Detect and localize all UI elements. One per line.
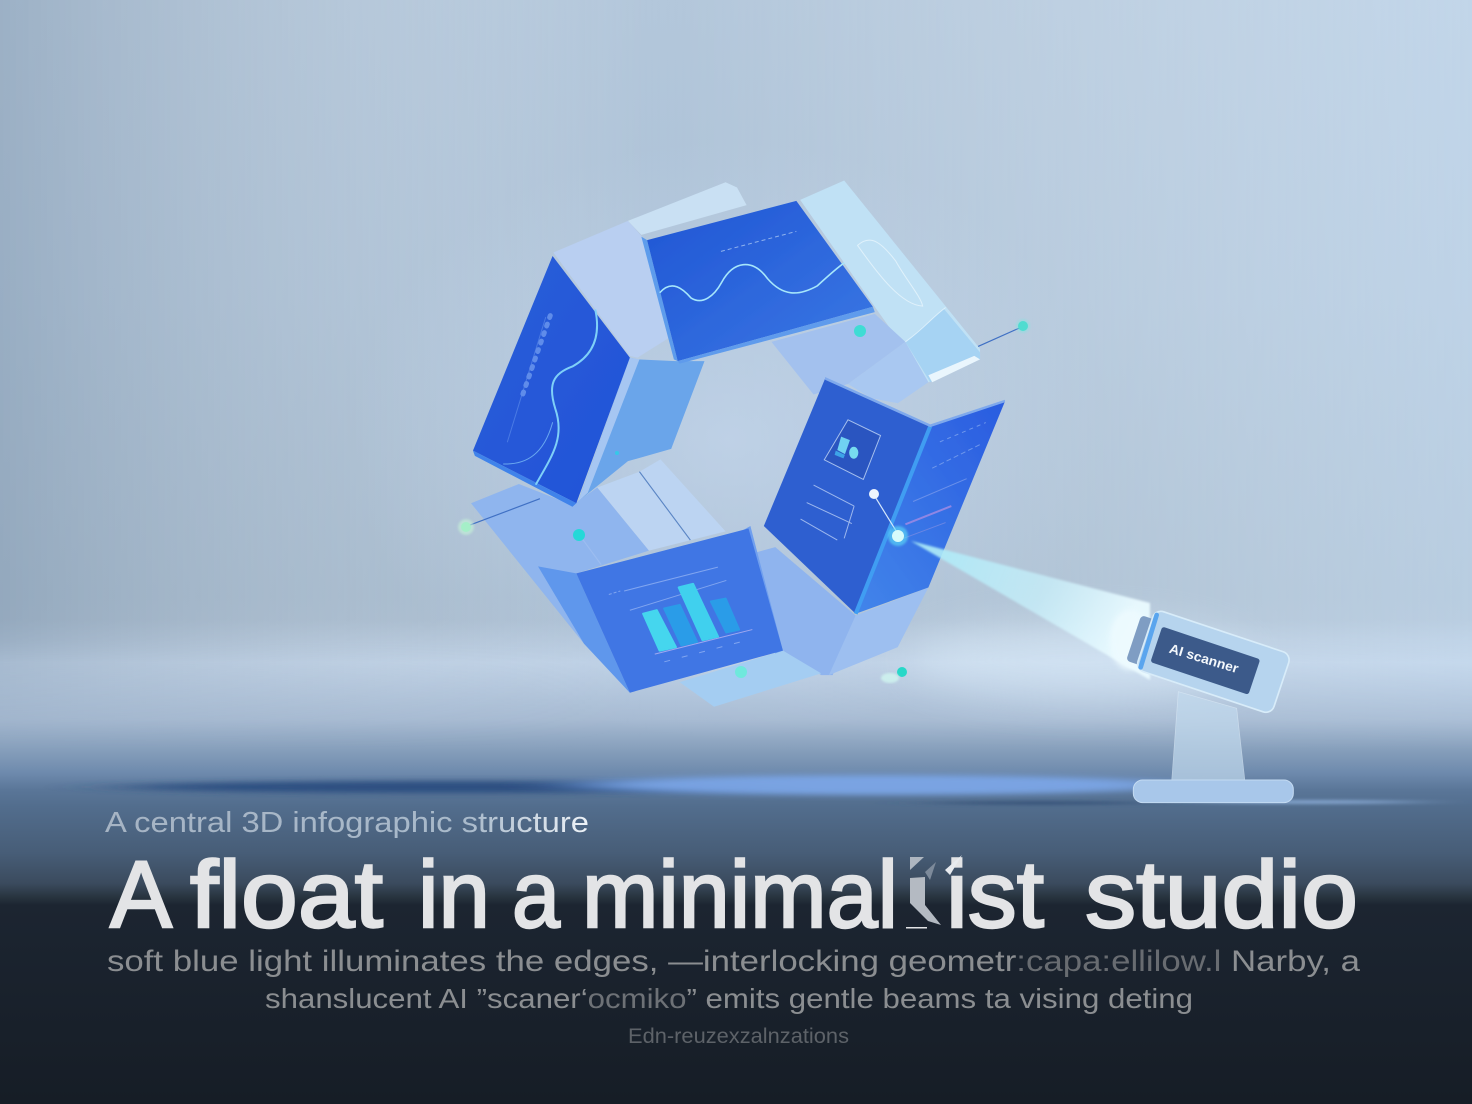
glowing nodes [458, 319, 1030, 683]
AI scanner device [1110, 609, 1293, 803]
title: a [512, 842, 560, 948]
scanner nozzle [1126, 615, 1163, 668]
title: minimal [582, 842, 898, 948]
thumbnail frame [824, 420, 881, 479]
gridlines [609, 567, 752, 662]
title: studio [1085, 842, 1358, 948]
panel: left wave screen [473, 256, 630, 507]
translucent back prisms [471, 181, 980, 707]
light beam [911, 541, 1150, 680]
bars [643, 584, 739, 651]
scanner stripe [1141, 615, 1157, 667]
panel: top wave screen [641, 201, 875, 364]
scanner display [1150, 627, 1260, 695]
scanner body [1135, 609, 1291, 715]
scanner glow [1110, 610, 1150, 670]
central 3D infographic structure [467, 181, 1022, 707]
connector lines [467, 327, 1022, 565]
subtitle: A central 3D infographic structure [105, 807, 589, 839]
description line 2: shanslucent AI ”scaner‘ ocmiko ” emits gentle beams ta vising deting [265, 983, 1193, 1014]
description line 3: Edn-reuzexzalnzations [628, 1025, 849, 1048]
description line 1: soft blue light illuminates the edges, —interlocking geometr :capa:ellilow.l Narby, a [107, 945, 1360, 978]
small caption [721, 231, 796, 251]
text lines [801, 423, 986, 540]
wave line [660, 263, 844, 301]
title: float [190, 842, 383, 948]
wave lines [504, 310, 597, 484]
title: in [418, 842, 490, 948]
title: A [110, 842, 173, 948]
title [110, 842, 1358, 948]
panel: bar chart screen [576, 526, 783, 693]
panel: right report screen [764, 377, 1005, 614]
map sketch on top right prism [858, 240, 946, 342]
scanner base [1133, 780, 1293, 803]
scanner label: AI scanner [1167, 641, 1240, 676]
title: ist [946, 842, 1044, 948]
title glass artifact [906, 855, 962, 928]
scanner stand [1172, 692, 1245, 782]
